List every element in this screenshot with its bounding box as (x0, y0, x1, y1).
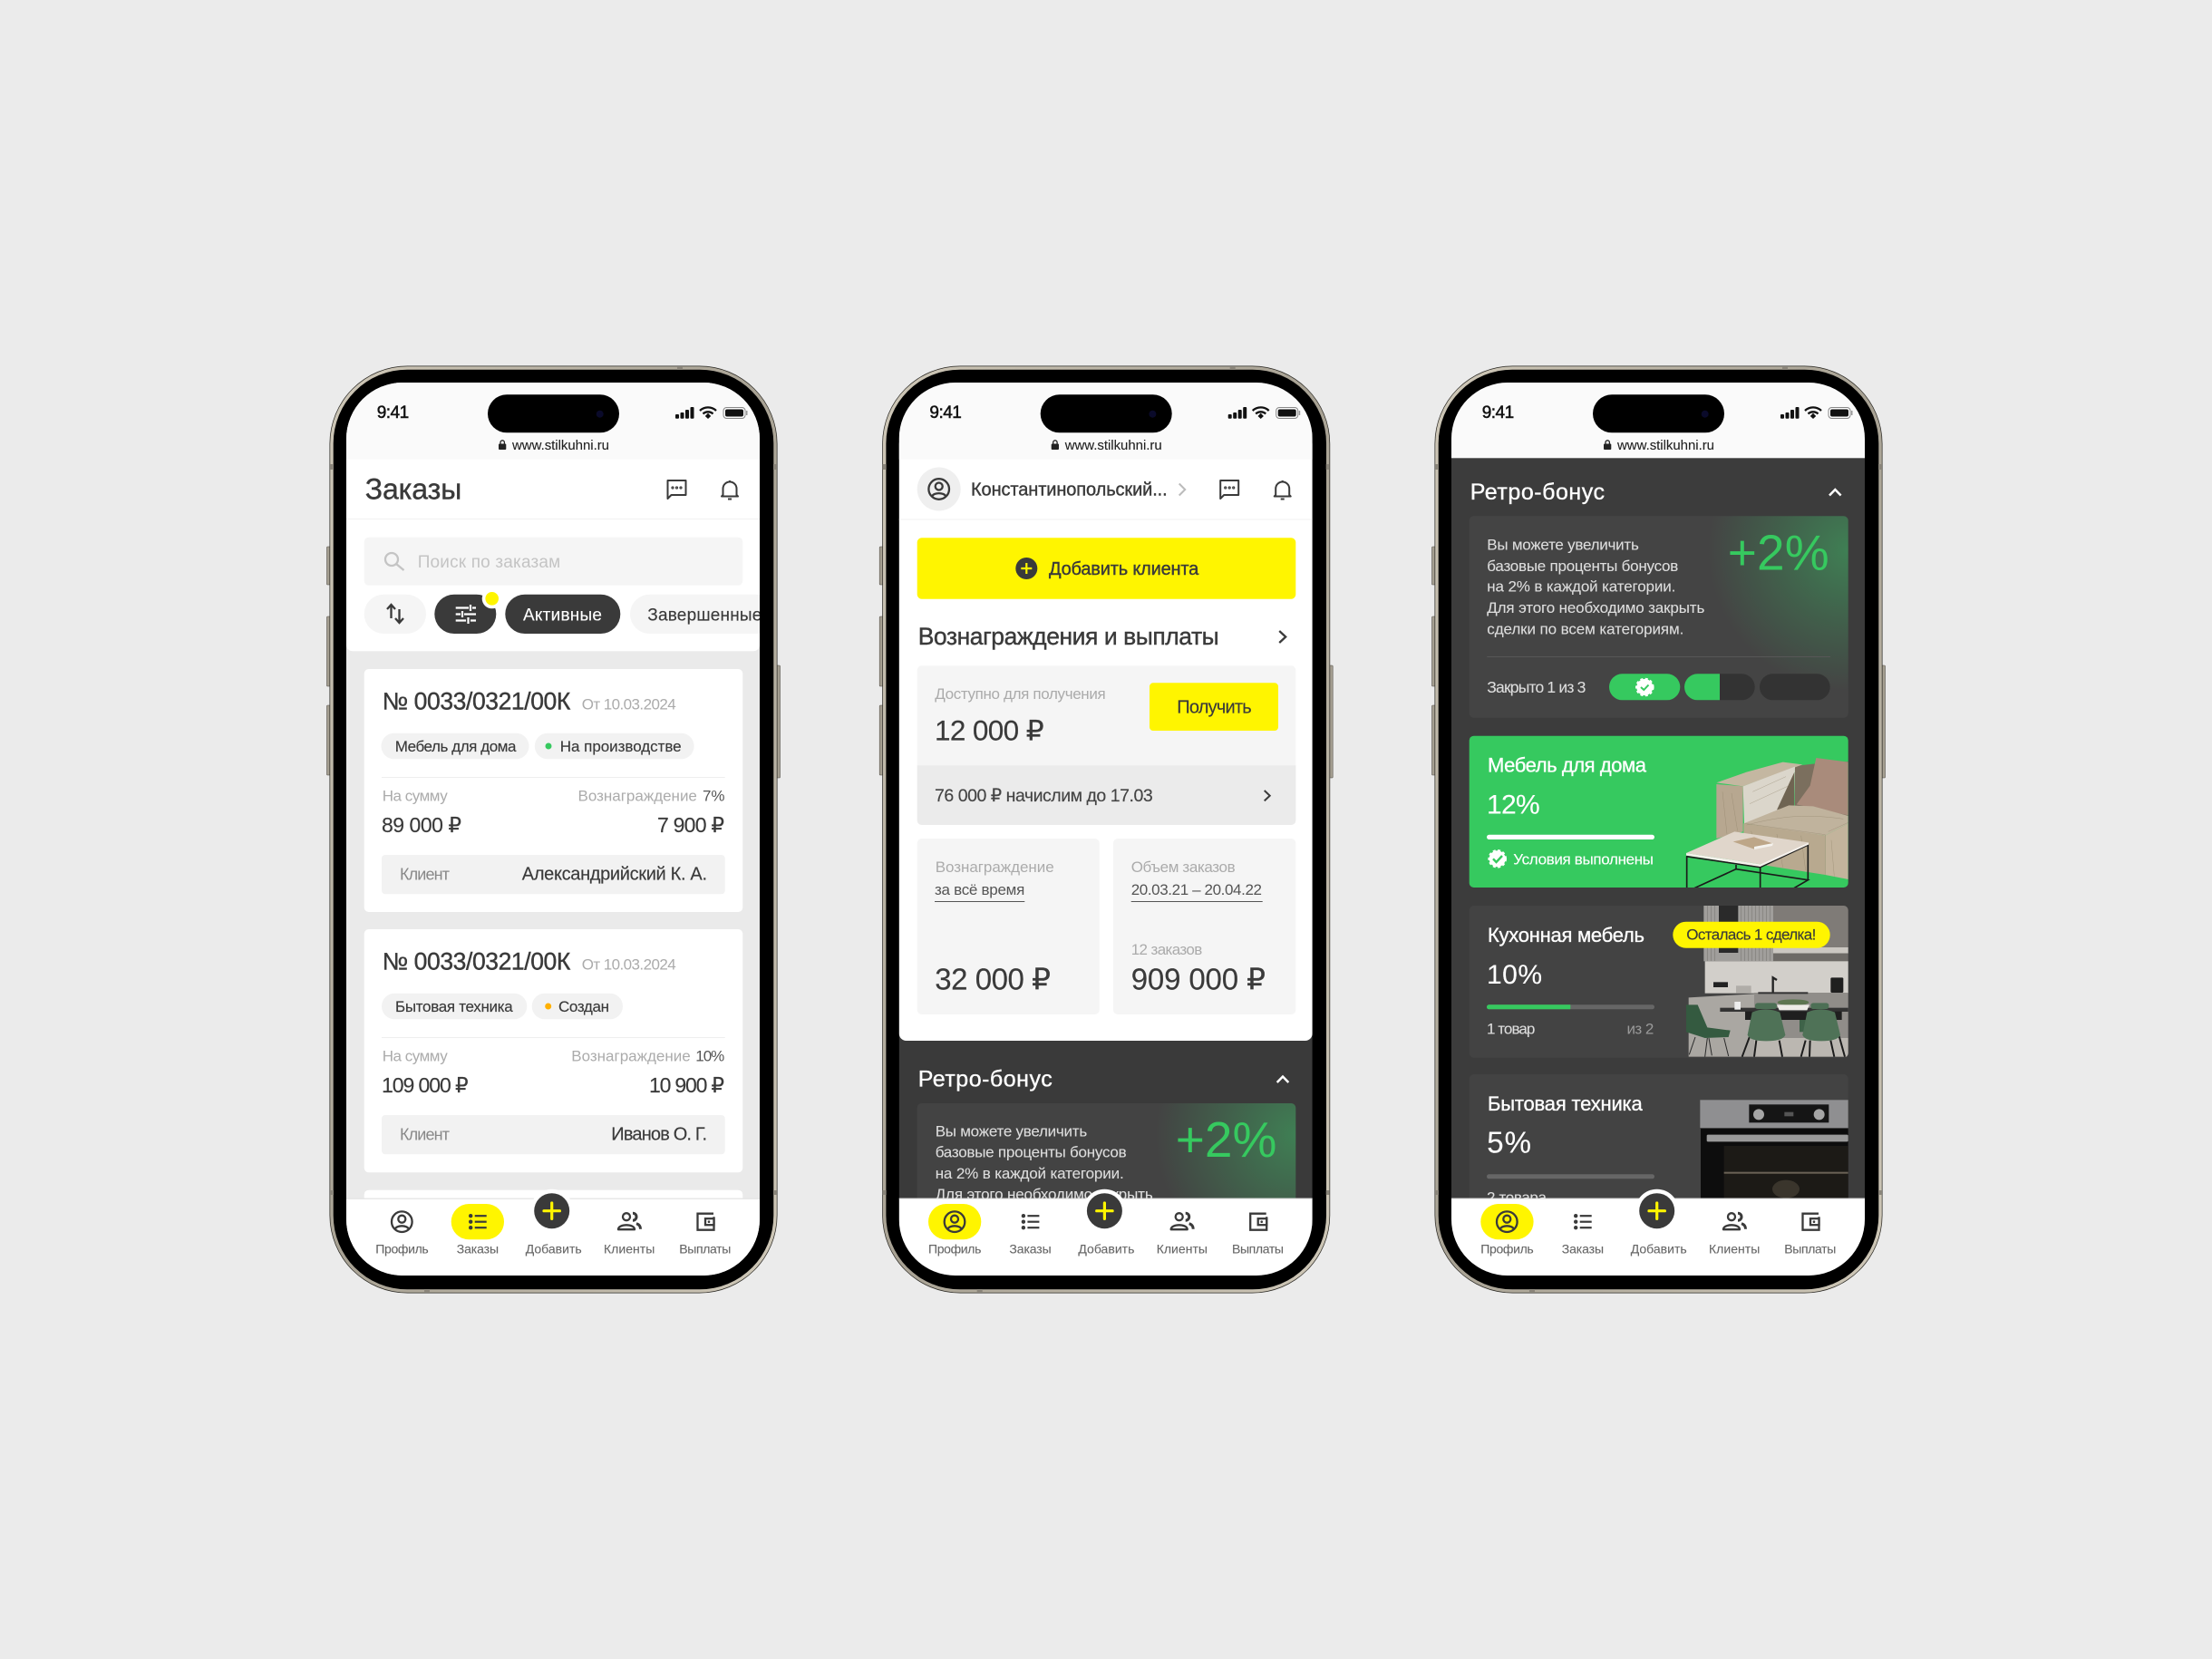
section heading: Вознаграждения и выплаты (918, 623, 1219, 650)
nav item: clients (604, 1213, 655, 1256)
retro bonus card (1470, 516, 1848, 718)
percent: 5% (1487, 1126, 1531, 1159)
user header: Константинопольский... (971, 480, 1168, 500)
nav item: add (1631, 1193, 1687, 1256)
amount (383, 1051, 468, 1093)
nav item: payouts (679, 1214, 731, 1256)
bottom navigation (899, 1189, 1313, 1276)
reward: 7 900 ₽ (657, 813, 724, 837)
order volume stat panel: 12 заказов (1131, 941, 1202, 958)
nav item: orders: Заказы (1562, 1242, 1604, 1256)
nav item: orders: Заказы (1009, 1242, 1052, 1256)
nav item: add: Добавить (526, 1242, 582, 1256)
sofa and table picture (1686, 758, 1848, 888)
category card: home furniture (1470, 736, 1848, 888)
badge: one deal left (1673, 922, 1830, 948)
phone 2: profile screen (879, 366, 1333, 1293)
bonus value: +2% (1176, 1111, 1276, 1168)
retro bonus heading: Ретро-бонус (918, 1067, 1053, 1092)
nav item: profile active (1480, 1204, 1534, 1256)
title: Заказы (365, 473, 461, 506)
retro bonus card: Для этого необходимо закрыть (1487, 599, 1704, 616)
nav item: payouts: Выплаты (1232, 1242, 1284, 1256)
retro bonus heading: Ретро-бонус (1470, 480, 1605, 505)
tab: completed: Завершенные (647, 606, 762, 625)
icon: chat (1220, 480, 1238, 499)
reward: Вознаграждение (571, 1048, 691, 1065)
order volume stat panel: Объем заказов (1131, 859, 1236, 876)
status bar: 9:41 (929, 403, 962, 422)
bottom navigation (346, 1189, 760, 1276)
reward stat panel: 32 000 ₽ (935, 963, 1051, 996)
nav item: orders active (451, 1204, 504, 1256)
status bar: 9:41 (1482, 403, 1514, 422)
nav item: orders active: Заказы (457, 1242, 499, 1256)
progress segment 1 complete (1609, 674, 1680, 700)
status bar: www.stilkuhni.ru (1616, 438, 1714, 453)
progress segment 2 half (1684, 674, 1755, 700)
retro bonus card: базовые проценты бонусов (1487, 558, 1678, 575)
user header (917, 468, 1185, 511)
client row (382, 855, 725, 894)
reward stat panel: за всё время (935, 881, 1024, 898)
order number: № 0033/0321/00К (383, 947, 571, 975)
tab: completed (630, 595, 760, 634)
nav item: profile active: Профиль (1480, 1242, 1534, 1256)
client row: Александрийский К. А. (522, 865, 707, 885)
nav item: clients: Клиенты (604, 1242, 655, 1256)
progress bar (1487, 1174, 1654, 1179)
percent: 10% (1487, 960, 1542, 990)
reward (573, 1051, 724, 1093)
device frame (326, 366, 780, 1293)
status bar: 9:41 (377, 403, 409, 422)
order volume stat panel (1113, 839, 1295, 1014)
retro bonus card: на 2% в каждой категории. (936, 1165, 1124, 1182)
retro bonus card: Для этого необходимо закрыть (936, 1186, 1153, 1203)
device frame (879, 366, 1333, 1293)
available payout panel: Доступно для получения (935, 685, 1106, 703)
nav item: add (1078, 1193, 1134, 1256)
progress label (1487, 1021, 1654, 1038)
order volume stat panel: 909 000 ₽ (1131, 963, 1266, 996)
tab: active (505, 595, 620, 634)
tag: status: На производстве (560, 738, 682, 755)
amount: 109 000 ₽ (382, 1073, 469, 1097)
amount (383, 791, 461, 832)
category title: Бытовая техника (1488, 1092, 1643, 1115)
status bar (346, 383, 760, 450)
order card 1 (364, 669, 742, 912)
sort button (364, 595, 426, 634)
nav item: profile active: Профиль (928, 1242, 981, 1256)
tag: category (382, 994, 527, 1019)
nav item: orders (1009, 1214, 1052, 1256)
kitchen picture (1686, 906, 1848, 1057)
badge: one deal left: Осталась 1 сделка! (1686, 927, 1816, 944)
icon: chat (667, 480, 685, 499)
retro bonus heading (1470, 480, 1841, 505)
nav item: payouts (1232, 1214, 1284, 1256)
bottom navigation (1451, 1189, 1865, 1276)
reward: 10 900 ₽ (649, 1073, 724, 1097)
nav item: payouts: Выплаты (1784, 1242, 1836, 1256)
nav item: clients: Клиенты (1157, 1242, 1208, 1256)
nav item: payouts (1784, 1214, 1836, 1256)
reward (578, 791, 724, 832)
status bar (899, 383, 1313, 460)
status bar (1451, 383, 1865, 458)
phone 1: orders screen (326, 366, 780, 1293)
get button: Получить (1177, 698, 1252, 718)
nav item: add: Добавить (1078, 1242, 1134, 1256)
progress bar (1487, 1004, 1654, 1009)
tag: status (535, 733, 694, 759)
retro bonus card: на 2% в каждой категории. (1487, 578, 1675, 596)
device frame (1432, 366, 1886, 1293)
add client button (917, 538, 1295, 599)
progress label: Закрыто 1 из 3 (1487, 678, 1586, 696)
tag: category (381, 733, 529, 759)
order card 2 (364, 929, 742, 1172)
available payout panel: 76 000 ₽ начислим до 17.03 (935, 786, 1153, 806)
tag: category: Бытовая техника (395, 998, 513, 1015)
icon: bell (1275, 480, 1291, 499)
phone 3: retro bonus screen (1432, 366, 1886, 1293)
client row (382, 1115, 725, 1154)
progress bar (1487, 835, 1654, 839)
order date: От 10.03.2024 (582, 956, 676, 973)
status bar: www.stilkuhni.ru (1064, 438, 1162, 453)
nav item: add: Добавить (1631, 1242, 1687, 1256)
reward stat panel: Вознаграждение (936, 859, 1054, 876)
nav item: payouts: Выплаты (679, 1242, 731, 1256)
nav item: profile: Профиль (375, 1242, 429, 1256)
percent: 12% (1487, 790, 1540, 820)
client row: Иванов О. Г. (611, 1125, 707, 1145)
search field (364, 538, 742, 586)
nav item: profile (375, 1211, 429, 1256)
nav item: profile active (928, 1204, 981, 1256)
client row: Клиент (400, 866, 450, 884)
retro bonus card (917, 1103, 1295, 1285)
order date: От 10.03.2024 (582, 695, 676, 713)
order volume stat panel: 20.03.21 – 20.04.22 (1131, 881, 1262, 898)
icon: bell (722, 480, 738, 499)
reward: 7% (703, 788, 725, 805)
order card 3 peek (364, 1189, 743, 1198)
conditions met: Условия выполнены (1513, 850, 1654, 868)
nav item: clients (1709, 1213, 1760, 1256)
status bar: www.stilkuhni.ru (511, 438, 609, 453)
reward: 10% (695, 1048, 724, 1065)
add client button: Добавить клиента (1049, 559, 1199, 579)
bonus value: +2% (1728, 524, 1829, 580)
nav item: clients: Клиенты (1709, 1242, 1760, 1256)
screen content (899, 383, 1313, 1285)
reward: Вознаграждение (578, 788, 697, 805)
progress label: 2 товара (1487, 1189, 1547, 1207)
screen content (1451, 383, 1865, 1276)
progress label: 1 товар (1487, 1021, 1535, 1038)
available payout panel (917, 665, 1295, 825)
retro bonus card: сделки по всем категориям. (1487, 620, 1683, 637)
oven picture (1700, 1100, 1848, 1201)
top panel (346, 459, 760, 651)
category card: appliances (1470, 1074, 1848, 1256)
retro bonus card: Вы можете увеличить (936, 1122, 1087, 1140)
retro bonus card: базовые проценты бонусов (936, 1144, 1127, 1160)
filter button (434, 592, 499, 634)
tag: status: Создан (558, 998, 609, 1015)
amount: На сумму (383, 788, 448, 805)
available payout panel: 12 000 ₽ (935, 714, 1044, 747)
reward stat panel (917, 839, 1100, 1014)
tab: active: Активные (523, 606, 602, 625)
order number: № 0033/0321/00К (383, 687, 571, 714)
screen content (346, 383, 775, 1276)
progress label: из 2 (1626, 1021, 1654, 1038)
nav item: add (526, 1193, 582, 1256)
search field: Поиск по заказам (418, 553, 560, 572)
tag: category: Мебель для дома (395, 738, 517, 755)
category title: Мебель для дома (1488, 754, 1647, 777)
retro bonus card: Вы можете увеличить (1487, 537, 1639, 554)
amount: На сумму (383, 1048, 448, 1065)
nav item: orders (1562, 1214, 1604, 1256)
category card: kitchen furniture (1470, 906, 1848, 1058)
progress segment 3 empty (1760, 674, 1830, 700)
retro bonus heading (918, 1067, 1288, 1092)
tag: status (532, 994, 623, 1019)
nav item: clients (1157, 1213, 1208, 1256)
category title: Кухонная мебель (1488, 924, 1644, 946)
amount: 89 000 ₽ (382, 813, 461, 837)
client row: Клиент (400, 1126, 450, 1144)
get button (1150, 683, 1278, 731)
